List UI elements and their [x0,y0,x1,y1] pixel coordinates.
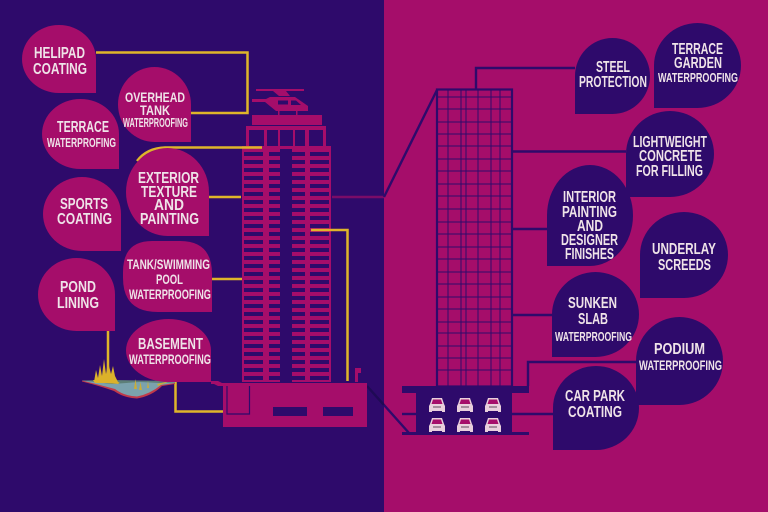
basement windows [273,407,353,416]
bubble: sports coating: COATING [57,211,112,228]
bubble: exterior texture and painting: TEXTURE [141,184,197,201]
tower grid [437,90,512,386]
right tower [437,90,512,386]
bubble: interior painting and designer finishes: AND [577,218,603,235]
tower outline [437,90,512,386]
bubble: car park coating: COATING [568,404,622,421]
bubble: terrace garden waterproofing: TERRACE [672,41,723,58]
bubble: basement waterproofing: WATERPROOFING [129,351,211,367]
bubble: overhead tank waterproofing: WATERPROOFING [123,115,188,130]
bubble: overhead tank waterproofing [118,67,191,142]
tower window slots [254,152,320,380]
bubble: interior painting and designer finishes [547,165,633,266]
tower body [242,146,331,382]
bubble: overhead tank waterproofing: TANK [140,102,170,118]
bubble: steel protection: PROTECTION [579,74,647,91]
bubble: interior painting and designer finishes: INTERIOR [563,189,616,206]
basement tank outline [227,386,250,414]
bubble: terrace waterproofing: WATERPROFING [47,135,116,150]
bubble: podium waterproofing: WATERPROOFING [639,357,722,373]
pond illustration [82,359,177,398]
bubble: lightweight concrete for filling [626,111,714,197]
bubble: sunken slab waterproofing: SUNKEN [568,295,617,312]
bubble: terrace garden waterproofing [654,23,741,108]
bubble: exterior texture and painting: AND [154,197,184,214]
bubble: sunken slab waterproofing: SLAB [578,311,608,328]
bubble: exterior texture and painting: PAINTING [140,211,199,228]
bubble: exterior texture and painting: EXTERIOR [138,170,199,187]
bubble: sports coating: SPORTS [60,196,108,213]
bubble: terrace waterproofing: TERRACE [57,119,109,136]
bubble: podium waterproofing: PODIUM [654,341,705,358]
connector: left building to right tower [332,90,437,433]
bubble: helipad coating [22,25,96,93]
roof block [252,115,322,125]
bubble: sunken slab waterproofing [552,272,639,357]
bubble: sunken slab waterproofing: WATERPROOFING [555,329,632,344]
bubble: tank and swimming pool waterproofing [123,241,212,312]
bubble: basement waterproofing: BASEMENT [138,336,203,353]
bubble: steel protection: STEEL [596,59,630,76]
roof pipe [355,368,361,382]
bubble: car park coating: CAR PARK [565,388,626,405]
left building [211,89,367,427]
panel: right background [384,0,768,512]
bubble: helipad coating: COATING [33,61,87,78]
bubble: podium waterproofing [636,317,723,405]
bubble: underlay screeds: SCREEDS [658,257,711,274]
bubble: basement waterproofing [126,319,211,382]
roof frame [246,126,326,146]
bubble: lightweight concrete for filling: CONCRETE [639,148,702,165]
bubble: tank and swimming pool waterproofing: TANK/SWIMMING [127,256,210,272]
bubble: interior painting and designer finishes: DESIGNER [561,232,618,249]
bubble: tank and swimming pool waterproofing: WATERPROOFING [129,286,211,302]
bubble: terrace waterproofing [42,99,119,169]
bubble: pond lining: LINING [57,295,99,312]
bubble: lightweight concrete for filling: FOR FILLING [636,163,703,180]
bubble: interior painting and designer finishes: FINISHES [565,246,614,263]
yellow connector lines [96,52,348,412]
podium strip [211,381,367,386]
bubble: helipad coating: HELIPAD [34,45,85,62]
purple connector lines [402,68,636,414]
bubble: car park coating [553,366,639,450]
bubble: steel protection [575,38,650,114]
basement block [223,386,367,427]
bubble: tank and swimming pool waterproofing: POOL [156,271,183,287]
bubble: exterior texture and painting [126,148,209,236]
bubble: lightweight concrete for filling: LIGHTWEIGHT [633,134,707,151]
bubble: terrace garden waterproofing: GARDEN [674,55,722,72]
bubble: pond lining: POND [60,279,96,296]
car icons [429,398,501,432]
car park structure [402,386,529,435]
bubble: interior painting and designer finishes: PAINTING [562,204,617,221]
bubble: underlay screeds [640,212,728,298]
tower central core [280,149,292,382]
helicopter icon [252,89,308,115]
panel: left background [0,0,384,512]
bubble: overhead tank waterproofing: OVERHEAD [125,89,185,105]
bubble: sports coating [43,177,121,251]
bubble: underlay screeds: UNDERLAY [652,241,716,258]
bubble: pond lining [38,258,115,331]
